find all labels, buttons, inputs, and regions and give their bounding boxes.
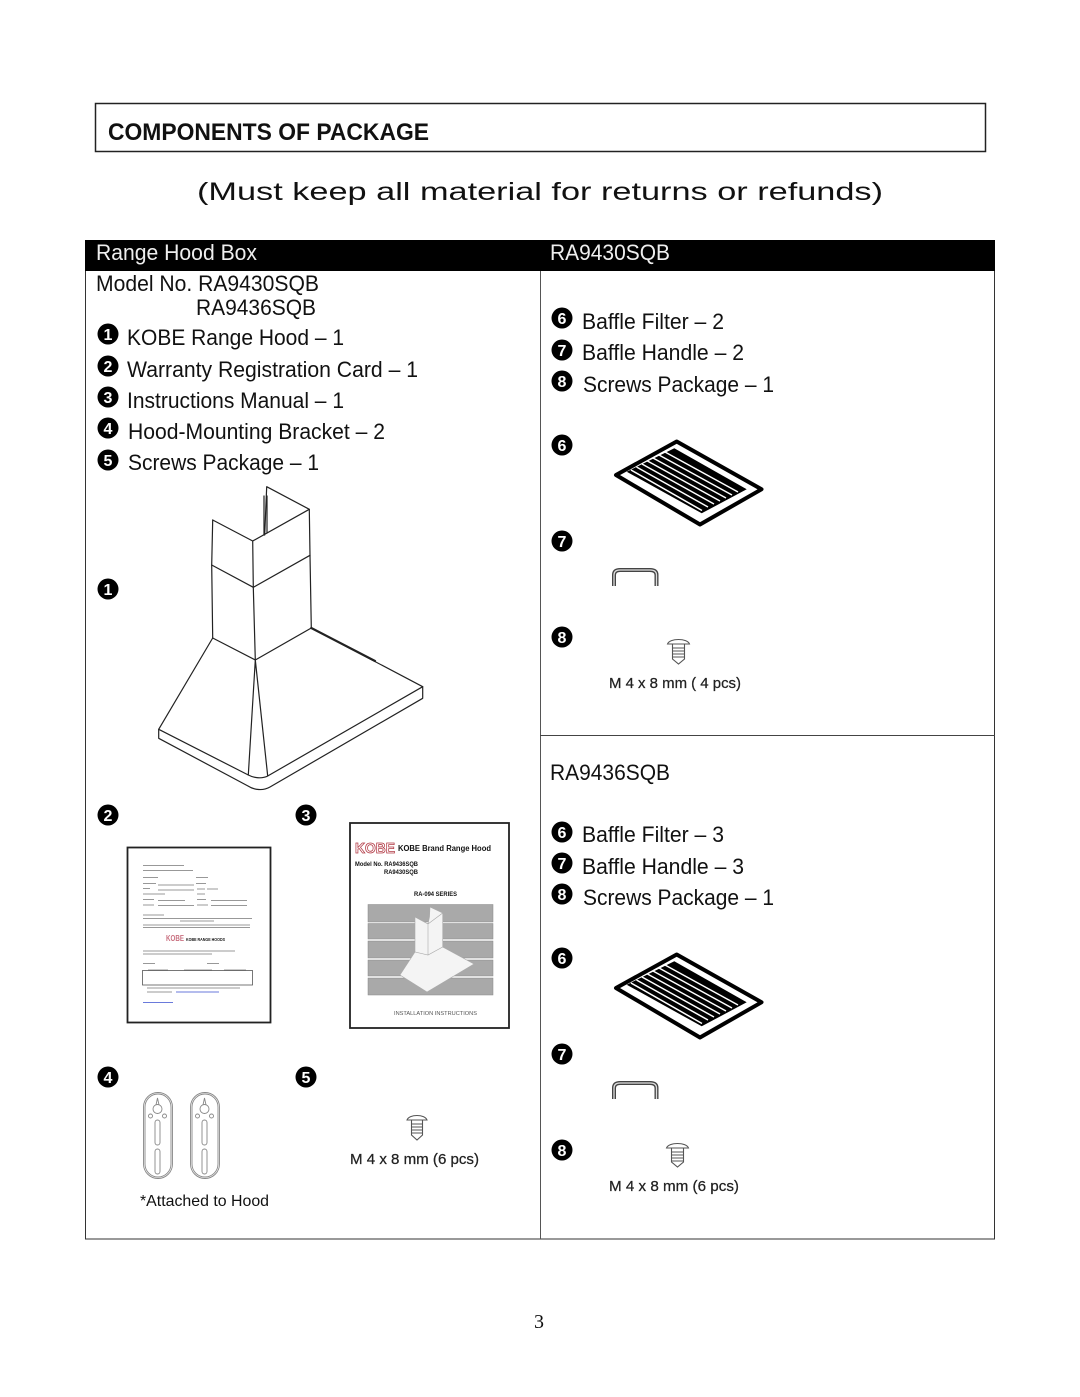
note: attached to hood: *Attached to Hood [140,1193,269,1210]
table frame [86,240,995,1239]
model heading: RA9436SQB [550,760,670,785]
list item 5: Screws Package – 1 [128,450,319,475]
marker 6 [552,948,572,968]
icon: baffle filter [616,442,762,524]
page number: 3 [534,1311,544,1333]
list item 4: Hood-Mounting Bracket – 2 [128,419,385,444]
panel: RA9430SQB contents [552,308,774,692]
heading: components of package: COMPONENTS OF PACKAGE [108,119,429,146]
marker 4 [98,1066,118,1088]
instruction manual cover: Model No. RA9436SQB [355,862,419,868]
marker 5 [296,1066,316,1088]
model numbers [96,271,319,320]
icon: mounting brackets [144,1092,220,1178]
list item 2: 2 [104,359,113,376]
panel: RA9436SQB contents [550,760,774,1195]
label: screw size 6 pcs: M 4 x 8 mm (6 pcs) [609,1178,739,1195]
instruction manual cover: KOBE Brand Range Hood [398,844,491,853]
list item 7: Baffle Handle – 2 [582,340,744,365]
list item 8: Screws Package – 1 [583,372,774,397]
list item 6: 6 [558,311,567,328]
marker 3 [296,804,316,826]
subtitle: keep material notice: (Must keep all material for returns or refunds) [197,178,883,206]
list item 8: 8 [558,374,567,391]
label: screw size 4 pcs: M 4 x 8 mm ( 4 pcs) [609,675,741,692]
table header bar: Range Hood Box [96,240,257,265]
list item 4: 4 [104,421,113,438]
marker 8: 8 [558,1143,567,1160]
marker 5: 5 [302,1070,311,1087]
warranty registration card: KOBE RANGE HOODS [186,937,225,942]
icon: range hood drawing [159,487,423,790]
list item 7: 7 [558,856,567,873]
instruction manual cover [350,823,509,1028]
instruction manual cover: INSTALLATION INSTRUCTIONS [394,1011,477,1017]
instruction manual cover: KOBE [355,840,395,857]
list item 3: Instructions Manual – 1 [127,388,344,413]
marker 8: 8 [558,630,567,647]
list item 6: Baffle Filter – 3 [582,822,724,847]
icon: screw [666,1144,688,1167]
list item 7: 7 [558,343,567,360]
list item 7: Baffle Handle – 3 [582,854,744,879]
icon: baffle handle [614,570,656,586]
warranty registration card: KOBE [166,934,185,943]
marker 7 [552,1044,572,1064]
marker 2 [98,804,118,826]
icon: screw [407,1116,427,1140]
marker 8 [552,1140,572,1160]
icon: baffle handle [614,1083,656,1099]
list item 6: Baffle Filter – 2 [582,309,724,334]
icon: screw [668,640,690,664]
label: screw size 6 pcs: M 4 x 8 mm (6 pcs) [350,1151,479,1168]
list item 5: 5 [104,453,113,470]
list item 8: Screws Package – 1 [583,885,774,910]
marker 7 [552,530,572,552]
list item 3: 3 [104,390,113,407]
marker 3: 3 [302,808,311,825]
list item 8: 8 [558,887,567,904]
marker 8 [552,626,572,648]
list item 1: 1 [104,327,113,344]
panel: range hood box contents [96,271,509,1210]
list item 2: Warranty Registration Card – 1 [127,357,418,382]
marker 1 [98,578,118,600]
list item 6: 6 [558,825,567,842]
marker 7: 7 [558,1047,567,1064]
instruction manual cover: RA9430SQB [384,870,419,876]
marker 6: 6 [558,951,567,968]
marker 6: 6 [558,438,567,455]
marker 4: 4 [104,1070,113,1087]
marker 6 [552,434,572,456]
warranty registration card [128,848,270,1022]
table header bar [85,240,995,271]
list item 1: KOBE Range Hood – 1 [127,325,344,350]
model numbers: RA9436SQB [196,295,316,320]
heading: components of package [96,104,986,152]
marker 2: 2 [104,808,113,825]
model numbers: Model No. RA9430SQB [96,271,319,296]
instruction manual cover: RA-094 SERIES [414,892,457,898]
marker 1: 1 [104,582,113,599]
icon: baffle filter [616,954,762,1038]
table header bar: RA9430SQB [550,240,670,265]
marker 7: 7 [558,534,567,551]
